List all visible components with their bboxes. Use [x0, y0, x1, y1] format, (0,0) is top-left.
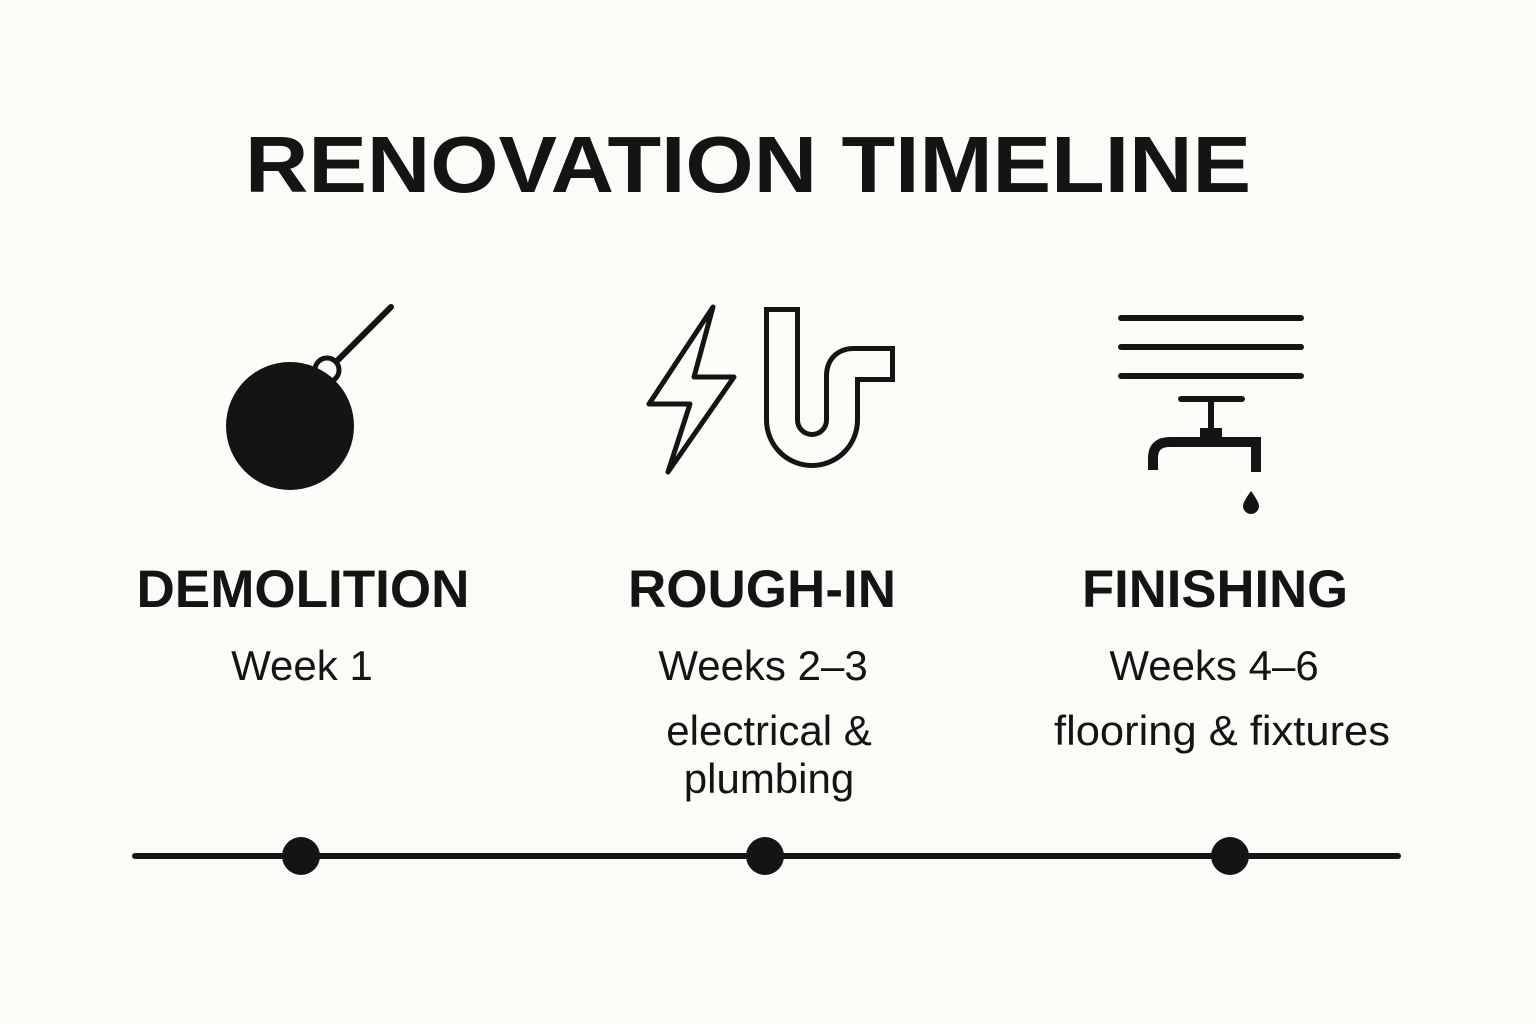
- title: RENOVATION TIMELINE: [245, 120, 1251, 209]
- heading: finishing: FINISHING: [1082, 560, 1348, 619]
- text: rough-in details: Weeks 2–3: [658, 642, 868, 689]
- text: finishing details: Weeks 4–6: [1109, 642, 1319, 689]
- icon: lightning and pipe: [649, 307, 895, 472]
- heading: rough-in: ROUGH-IN: [628, 560, 896, 619]
- text: rough-in details: electrical &: [666, 707, 872, 754]
- icon: wrecking ball: [226, 307, 391, 490]
- heading: demolition: DEMOLITION: [136, 560, 470, 619]
- text: rough-in details: plumbing: [684, 755, 854, 802]
- text: finishing details: flooring & fixtures: [1054, 707, 1390, 754]
- icon: finishing lines and faucet: [1121, 318, 1301, 514]
- timeline: [135, 837, 1398, 875]
- text: week 1: Week 1: [231, 642, 373, 689]
